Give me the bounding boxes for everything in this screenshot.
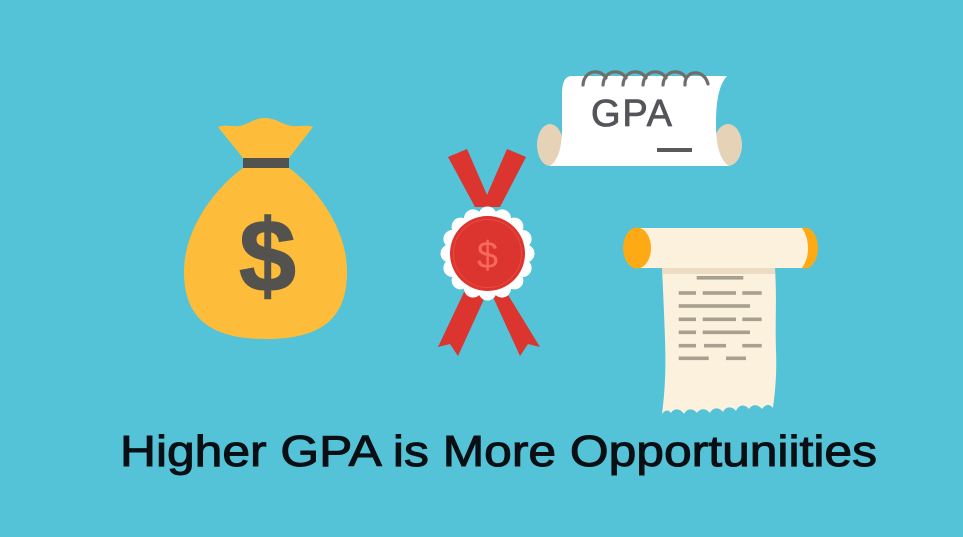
icon: GPA notepad scroll: GPA xyxy=(591,93,673,135)
title: Higher GPA is More Opportuniities xyxy=(120,427,877,476)
icon: money bag: $ xyxy=(239,199,296,313)
icon: red ribbon seal: $ xyxy=(477,235,498,277)
icon: GPA notepad scroll xyxy=(537,72,742,166)
icon: red ribbon seal xyxy=(438,149,540,356)
icon: receipt scroll xyxy=(623,228,818,414)
icon: money bag xyxy=(184,118,347,339)
